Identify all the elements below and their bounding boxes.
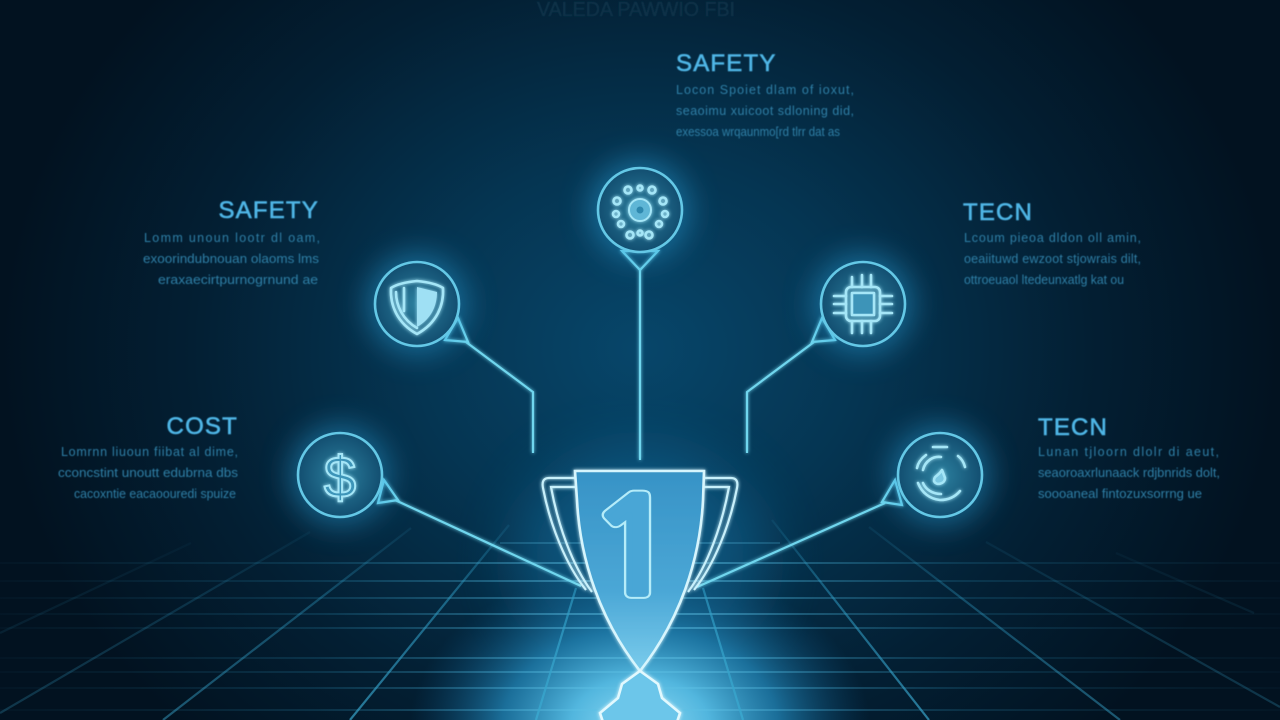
text block: lower tech [1038,414,1220,501]
trophy backlight [515,450,765,670]
text block: top safety: Locon Spoiet dlam of ioxut, [676,83,854,97]
node: lower tech [890,425,990,525]
icon: gear ring [613,186,668,238]
rank number: 1 [587,483,681,614]
connector: top safety [622,251,658,460]
trophy cup [575,471,704,671]
connector: left safety [445,318,533,453]
icon: shield [391,281,443,334]
text block: cost: Lomrnn liuoun fiibat al dime, [61,445,238,459]
rank number: 1 [587,483,681,614]
node: cost [290,425,390,525]
icon: dollar sign: $ [324,445,356,510]
node: left safety [367,254,467,354]
node: top safety [590,160,690,260]
text block: top safety: exessoa wrqaunmo[rd tlrr dat as [676,125,840,139]
icon: chip [834,275,892,333]
text block: left safety: Lomm unoun lootr dl oam, [144,231,320,245]
perspective floor grid [0,520,1280,720]
text block: top safety: seaoimu xuicoot sdloning did, [676,104,854,118]
text block: left safety: eraxaecirtpurnogrnund ae [158,273,318,287]
text block: left safety: exoorindubnouan olaoms lms [143,252,319,266]
node: right tech [813,254,913,354]
trophy [543,471,737,720]
text block: lower tech: TECN [1038,414,1108,441]
text block: cost: cconcstint unoutt edubrna dbs [58,466,238,480]
text block: cost [58,413,238,501]
trophy base [600,671,680,720]
icon: cycle gauge [917,447,965,500]
text block: left safety [143,197,320,287]
text block: right tech: Lcoum pieoa dldon oll amin, [964,231,1141,245]
text block: right tech: ottroeuaol ltedeunxatlg kat ou [964,273,1124,287]
text block: right tech: oeaiituwd ewzoot stjowrais dilt, [964,252,1141,266]
text block: left safety: SAFETY [218,197,319,224]
text block: top safety [676,50,854,139]
connector: lower tech [697,480,902,587]
trophy handles [543,478,737,592]
text block: cost: cacoxntie eacaoouredi spuize [74,487,236,501]
text block: lower tech: seaoroaxrlunaack rdjbnrids dolt, [1038,466,1220,480]
connector: right tech [747,318,835,453]
text block: lower tech: Lunan tjloorn dlolr di aeut, [1038,445,1219,459]
floor light glow [400,540,880,720]
text block: right tech: TECN [963,199,1033,226]
text block: cost: COST [167,413,238,440]
connector: cost [378,480,581,586]
text block: top safety: SAFETY [676,50,777,77]
text block: lower tech: soooaneal fintozuxsorrng ue [1038,487,1202,501]
text block: right tech [963,199,1141,287]
